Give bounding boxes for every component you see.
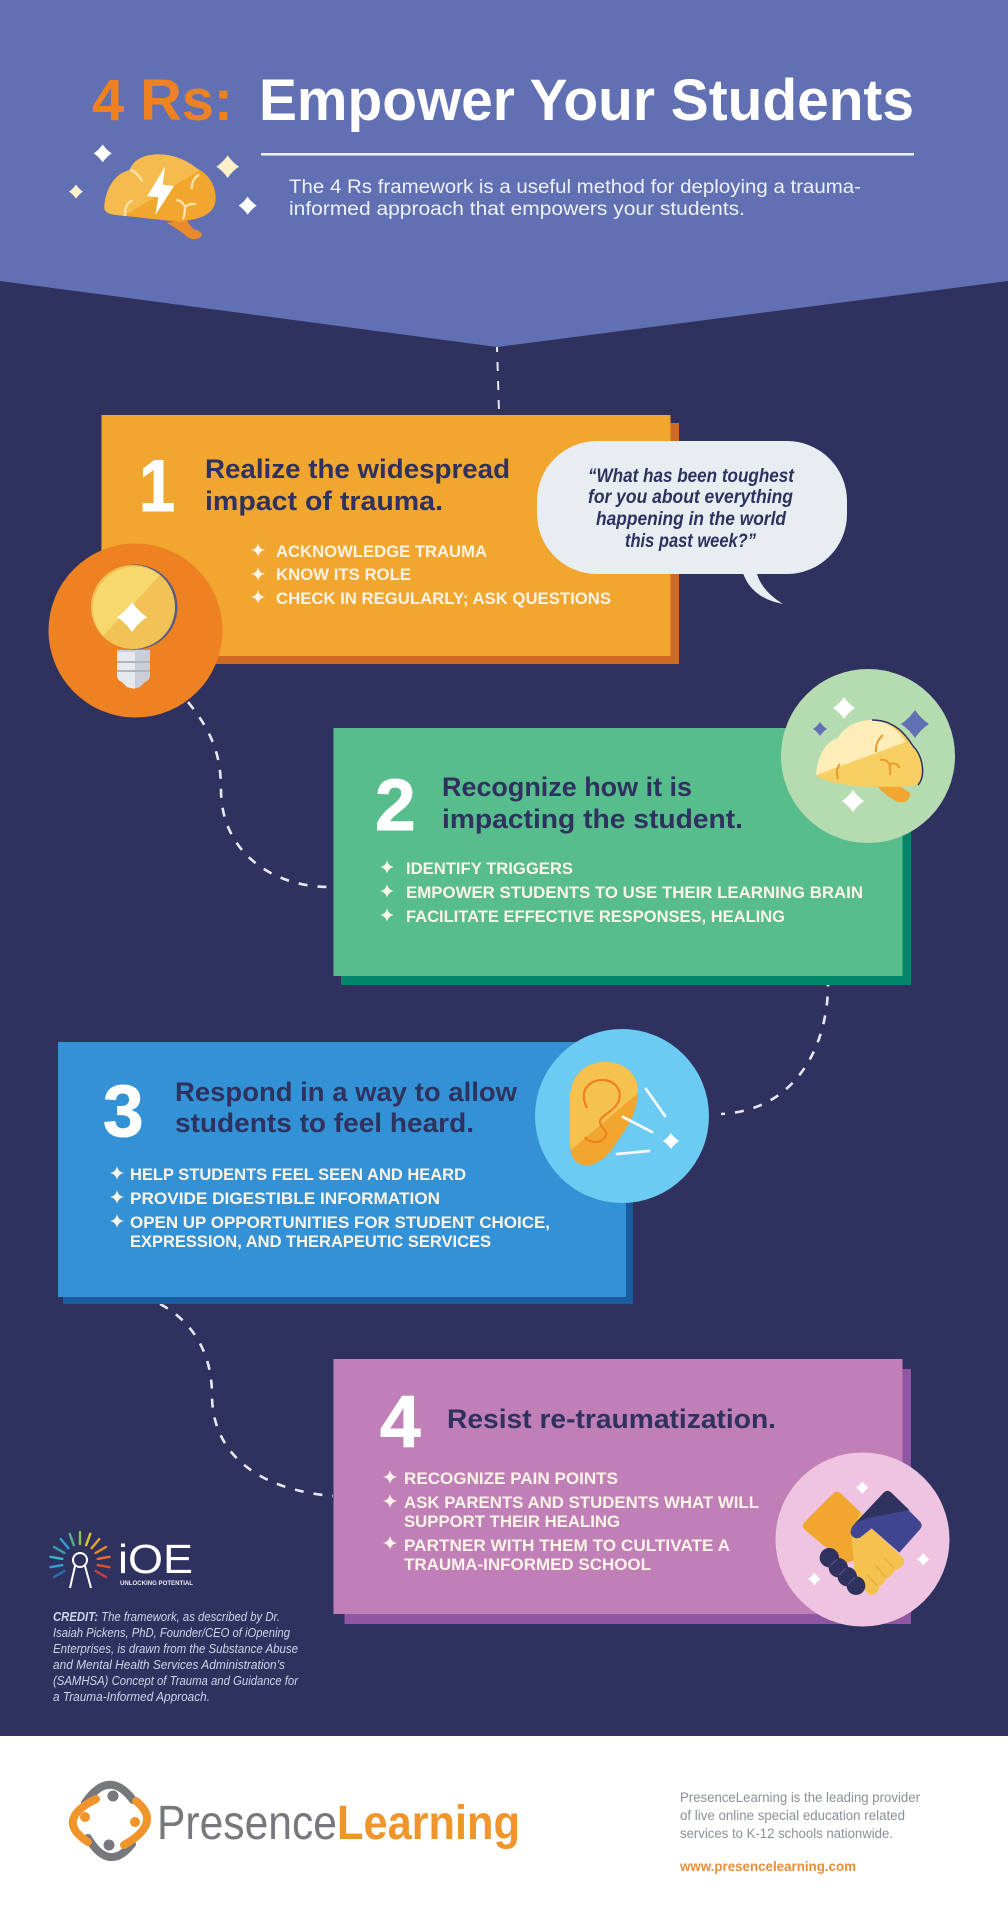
header banner <box>0 0 1008 347</box>
footer text: of live online special education related <box>680 1808 905 1823</box>
callout: speech bubble: “What has been toughest <box>588 466 795 487</box>
heading 3 <box>175 1077 518 1138</box>
icon: light bulb <box>48 544 222 718</box>
number 1: 1 <box>139 446 175 527</box>
panel: step 3 respond <box>58 1029 709 1304</box>
arrow: dashed connector from step 3 to step 4 <box>160 1304 333 1496</box>
bullet list 2: EMPOWER STUDENTS TO USE THEIR LEARNING BRAIN <box>406 884 863 902</box>
logo: PresenceLearning wordmark: Learning <box>337 1797 520 1850</box>
intro text: The 4 Rs framework is a useful method for deploying a trauma- <box>289 177 861 198</box>
bullet list 2: IDENTIFY TRIGGERS <box>406 860 573 878</box>
bullet list 4: RECOGNIZE PAIN POINTS <box>404 1470 618 1488</box>
panel: step 1 realize <box>48 415 847 718</box>
icon: brain with lightning <box>69 144 257 239</box>
callout: speech bubble: this past week?” <box>625 531 756 552</box>
credit text: and Mental Health Services Administration’s <box>53 1658 285 1672</box>
panel: step 2 recognize <box>334 669 955 985</box>
bullet list 3: OPEN UP OPPORTUNITIES FOR STUDENT CHOICE, <box>130 1214 550 1232</box>
bullet list 1: CHECK IN REGULARLY; ASK QUESTIONS <box>276 590 611 608</box>
credit text: Enterprises, is drawn from the Substance Abuse <box>53 1642 298 1656</box>
title: 4 Rs: <box>92 68 233 133</box>
heading 4: Resist re-traumatization. <box>447 1404 776 1434</box>
bullet list 3: PROVIDE DIGESTIBLE INFORMATION <box>130 1190 440 1208</box>
intro text: informed approach that empowers your students. <box>289 199 745 220</box>
arrow: dashed connector from step 1 to step 2 <box>188 702 330 887</box>
credit text: a Trauma-Informed Approach. <box>53 1690 210 1704</box>
bullet list 4 <box>383 1470 759 1574</box>
arrow: dashed connector from step 2 to step 3 <box>721 985 828 1114</box>
number 4: 4 <box>380 1382 421 1463</box>
panel: footer <box>0 1736 1008 1920</box>
callout: speech bubble <box>537 441 847 604</box>
title: Empower Your Students <box>259 68 914 133</box>
bullet list 4: SUPPORT THEIR HEALING <box>404 1513 620 1531</box>
footer text <box>679 1790 920 1874</box>
intro text <box>289 177 861 220</box>
bullet list 1: ACKNOWLEDGE TRAUMA <box>276 543 487 561</box>
icon: ear <box>535 1029 709 1203</box>
logo: iOE: iOE <box>118 1536 193 1582</box>
bullet list 3 <box>110 1166 550 1251</box>
credit text: Isaiah Pickens, PhD, Founder/CEO of iOpening <box>53 1626 290 1640</box>
callout: speech bubble: for you about everything <box>588 487 793 508</box>
credit text <box>53 1610 299 1704</box>
bullet list 2 <box>380 860 863 926</box>
bullet list 3: HELP STUDENTS FEEL SEEN AND HEARD <box>130 1166 466 1184</box>
bullet list 1 <box>251 543 611 608</box>
bullet list 2: FACILITATE EFFECTIVE RESPONSES, HEALING <box>406 908 785 926</box>
logo: PresenceLearning mark <box>73 1785 147 1857</box>
footer text: PresenceLearning is the leading provider <box>680 1790 920 1805</box>
bullet list 4: PARTNER WITH THEM TO CULTIVATE A <box>404 1537 730 1555</box>
logo: PresenceLearning wordmark <box>157 1797 520 1850</box>
heading 1: Realize the widespread <box>205 454 510 484</box>
arrow: dashed connector from header to step 1 <box>497 347 499 412</box>
bullet list 4: ASK PARENTS AND STUDENTS WHAT WILL <box>404 1494 759 1512</box>
callout: speech bubble: happening in the world <box>596 509 786 530</box>
heading 2: Recognize how it is <box>442 772 692 802</box>
heading 3: Respond in a way to allow <box>175 1077 518 1107</box>
bullet list 1: KNOW ITS ROLE <box>276 566 411 584</box>
logo: PresenceLearning wordmark: Presence <box>157 1797 337 1850</box>
heading 2 <box>442 772 743 834</box>
number 2: 2 <box>375 765 416 846</box>
logo: iOE: UNLOCKING POTENTIAL <box>120 1580 193 1587</box>
bullet list 4: TRAUMA-INFORMED SCHOOL <box>404 1556 651 1574</box>
footer text: www.presencelearning.com <box>679 1859 856 1874</box>
credit text: (SAMHSA) Concept of Trauma and Guidance for <box>53 1674 299 1688</box>
heading 2: impacting the student. <box>442 804 743 834</box>
icon: learning brain <box>781 669 955 843</box>
heading 1 <box>205 454 510 516</box>
footer text: services to K-12 schools nationwide. <box>680 1826 893 1841</box>
panel: step 4 resist <box>334 1359 950 1626</box>
number 3: 3 <box>103 1071 144 1152</box>
icon: handshake <box>776 1452 950 1626</box>
logo: iOE <box>50 1532 193 1588</box>
credit text: CREDIT: The framework, as described by Dr. <box>53 1610 280 1624</box>
heading 1: impact of trauma. <box>205 486 443 516</box>
bullet list 3: EXPRESSION, AND THERAPEUTIC SERVICES <box>130 1233 491 1251</box>
heading 3: students to feel heard. <box>175 1108 474 1138</box>
